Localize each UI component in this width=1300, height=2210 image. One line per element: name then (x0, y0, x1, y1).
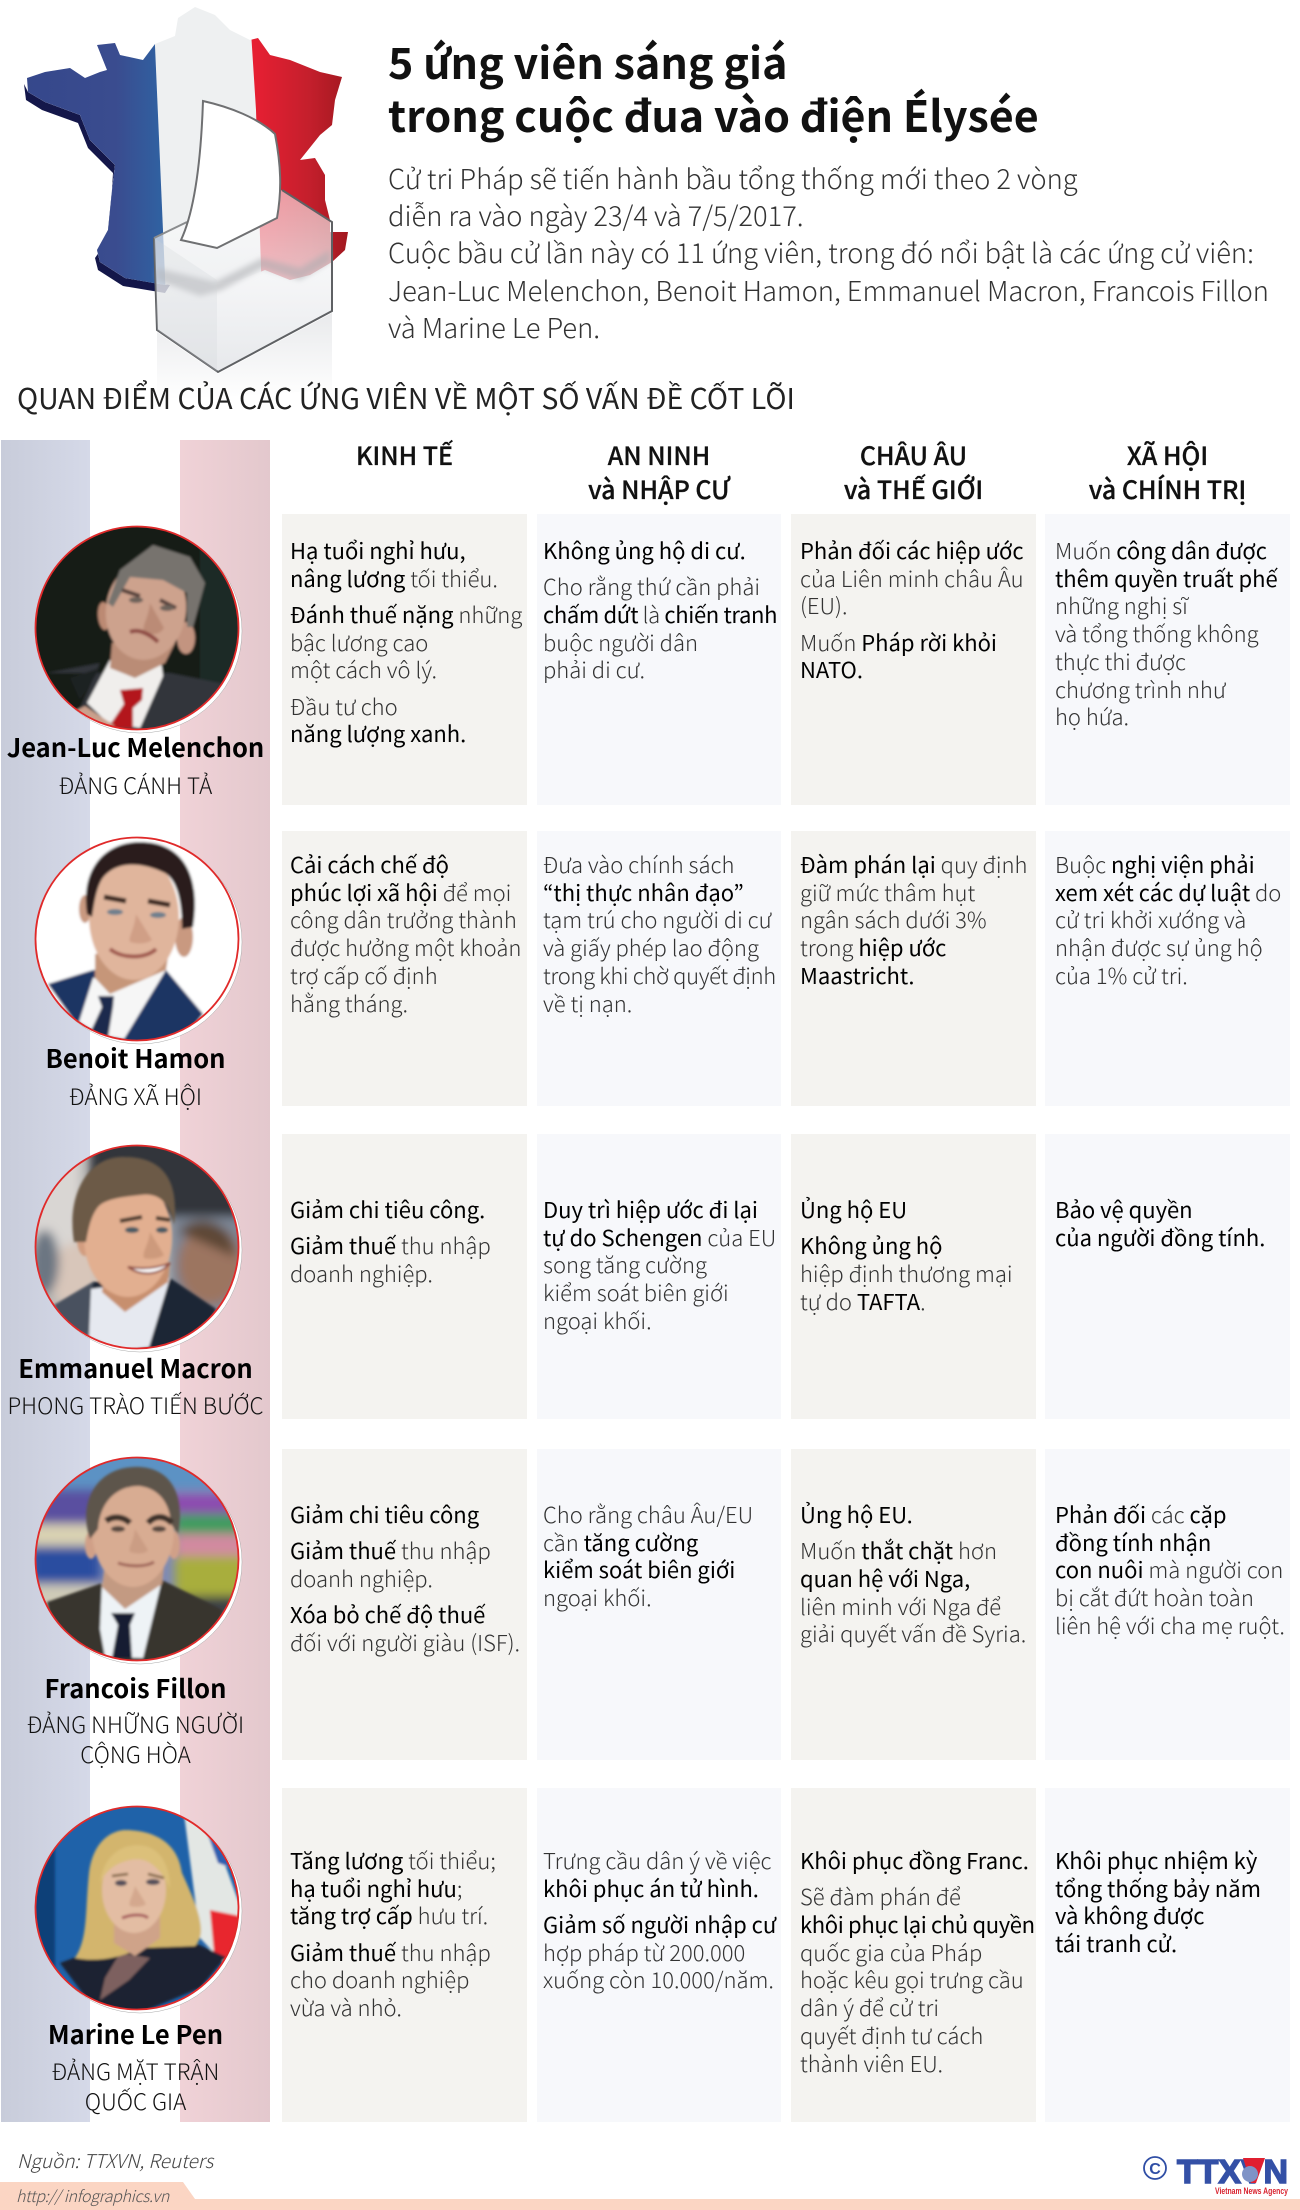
cell: society, Melenchon: những nghị sĩ (1055, 589, 1188, 621)
column heading: security and immigration: và NHẬP CƯ (588, 471, 730, 507)
cell: Europe, Le Pen: thành viên EU. (800, 2047, 943, 2079)
cell: security, Hamon: Đưa vào chính sách (543, 848, 734, 880)
portrait: Marine Le Pen (34, 1806, 242, 2014)
cell: security, Fillon: Cho rằng châu Âu/EU (543, 1498, 753, 1530)
map extrusion (24, 84, 170, 293)
cell: Europe, Macron: Ủng hộ EU (800, 1193, 907, 1225)
header illustration: France map with ballot box (24, 7, 348, 374)
cell: society, Fillon: liên hệ với cha mẹ ruột. (1055, 1609, 1285, 1641)
cell: economy, Fillon: doanh nghiệp. (290, 1562, 433, 1594)
cell: Europe, Fillon: liên minh với Nga để (800, 1590, 1001, 1622)
column heading: economy: KINH TẾ (356, 437, 453, 473)
cell: society, Fillon: đồng tính nhận (1055, 1526, 1211, 1558)
portrait: Emmanuel Macron (34, 1144, 242, 1352)
cell: Europe, Melenchon: Muốn Pháp rời khỏi (800, 626, 997, 658)
intro text: diễn ra vào ngày 23/4 và 7/5/2017. (388, 194, 804, 234)
cell: society, Hamon: của 1% cử tri. (1055, 959, 1188, 991)
column heading: security and immigration (588, 437, 731, 507)
cell: economy, Hamon: trợ cấp cố định (290, 959, 438, 991)
cell: society, Hamon (1045, 831, 1290, 1106)
cell: security, Hamon (537, 831, 781, 1106)
cell: security, Le Pen: khôi phục án tử hình. (543, 1872, 759, 1904)
cell: Europe, Le Pen: Sẽ đàm phán để (800, 1880, 961, 1912)
cell: Europe, Hamon: Đàm phán lại quy định (800, 848, 1027, 880)
cell: security, Le Pen: hợp pháp từ 200.000 (543, 1936, 745, 1968)
cell: society, Le Pen: và không được (1055, 1899, 1204, 1931)
cell: Europe, Melenchon: (EU). (800, 589, 847, 621)
cell: economy, Melenchon: Đánh thuế nặng những (290, 598, 522, 630)
logo: TTXVN: C (1149, 2161, 1161, 2178)
cell: Europe, Fillon: quan hệ với Nga, (800, 1562, 970, 1594)
cell: economy, Hamon: được hưởng một khoản (290, 931, 521, 963)
column heading: society and politics: và CHÍNH TRỊ (1089, 471, 1246, 507)
logo: TTXVN: TTXVN (1177, 2153, 1288, 2190)
party: National Front: ĐẢNG MẶT TRẬN (52, 2055, 219, 2087)
cell: security, Hamon: “thị thực nhân đạo” (543, 876, 744, 908)
cell: Europe, Le Pen: quyết định tư cách (800, 2019, 983, 2051)
cell: Europe, Melenchon: Phản đối các hiệp ước (800, 534, 1024, 566)
cell: Europe, Macron: tự do TAFTA. (800, 1285, 926, 1317)
party: Republicans: CỘNG HÒA (80, 1738, 191, 1770)
intro text: Cuộc bầu cử lần này có 11 ứng viên, trong đó nổi bật là các ứng cử viên: (388, 231, 1254, 271)
cell: economy, Melenchon (282, 514, 527, 805)
cell: security, Fillon: cần tăng cường (543, 1526, 698, 1558)
cell: economy, Fillon (282, 1449, 527, 1760)
cell: Europe, Hamon: Maastricht. (800, 959, 914, 991)
cell: security, Macron: song tăng cường (543, 1248, 707, 1280)
section heading: QUAN ĐIỂM CỦA CÁC ỨNG VIÊN VỀ MỘT SỐ VẤN ĐỀ CỐT LÕI (17, 377, 795, 418)
column heading: Europe and world: CHÂU ÂU (860, 437, 967, 473)
cell: Europe, Melenchon (791, 514, 1036, 805)
cell: security, Le Pen: xuống còn 10.000/năm. (543, 1963, 774, 1995)
cell: economy, Macron: Giảm chi tiêu công. (290, 1193, 485, 1225)
cell: economy, Hamon: hằng tháng. (290, 987, 408, 1019)
cell: economy, Hamon: công dân trưởng thành (290, 903, 517, 935)
cell: economy, Melenchon: nâng lương tối thiểu. (290, 562, 498, 594)
cell: society, Melenchon: thêm quyền truất phế (1055, 562, 1278, 594)
portrait: Jean-Luc Melenchon (34, 526, 242, 734)
intro text: Cử tri Pháp sẽ tiến hành bầu tổng thống mới theo 2 vòng (388, 157, 1078, 197)
cell: economy, Fillon: đối với người giàu (ISF). (290, 1626, 520, 1658)
source note: Nguồn: TTXVN, Reuters (17, 2147, 213, 2174)
cell: security, Le Pen (537, 1788, 781, 2122)
cell: Europe, Le Pen: khôi phục lại chủ quyền (800, 1908, 1035, 1940)
portrait: Francois Fillon (34, 1456, 242, 1664)
cell: society, Le Pen: tái tranh cử. (1055, 1927, 1177, 1959)
cell: society, Le Pen: Khôi phục nhiệm kỳ (1055, 1844, 1257, 1876)
cell: economy, Macron (282, 1134, 527, 1419)
party: National Front: QUỐC GIA (85, 2084, 186, 2116)
cell: economy, Fillon: Giảm thuế thu nhập (290, 1534, 491, 1566)
portrait: Benoit Hamon (34, 836, 242, 1044)
tricolour background stripes (1, 440, 270, 2122)
cell: security, Melenchon (537, 514, 781, 805)
logo: TTXVN (1143, 2153, 1288, 2196)
cell: security, Hamon: trong khi chờ quyết định (543, 959, 776, 991)
cell: economy, Macron: Giảm thuế thu nhập (290, 1229, 491, 1261)
intro text (388, 157, 1269, 346)
map colour bands (27, 7, 348, 285)
cell: economy, Hamon (282, 831, 527, 1106)
cell: economy, Le Pen: vừa và nhỏ. (290, 1991, 402, 2023)
cell: society, Macron (1045, 1134, 1290, 1419)
cell: society, Fillon: bị cắt đứt hoàn toàn (1055, 1581, 1254, 1613)
cell: economy, Fillon: Xóa bỏ chế độ thuế (290, 1598, 485, 1630)
cell: economy, Hamon: Cải cách chế độ (290, 848, 449, 880)
cell: Europe, Macron: hiệp định thương mại (800, 1257, 1013, 1289)
title (388, 30, 1039, 145)
cell: Europe, Melenchon: của Liên minh châu Âu (800, 562, 1024, 594)
cell: security, Melenchon: chấm dứt là chiến tranh (543, 598, 777, 630)
cell: Europe, Le Pen (791, 1788, 1036, 2122)
cell: Europe, Le Pen: dân ý để cử tri (800, 1991, 939, 2023)
cell: security, Macron: Duy trì hiệp ước đi lại (543, 1193, 758, 1225)
column heading: Europe and world: và THẾ GIỚI (844, 471, 983, 507)
cell: Europe, Fillon: Ủng hộ EU. (800, 1498, 913, 1530)
title: 5 ứng viên sáng giá (388, 30, 788, 92)
party: left wing: ĐẢNG CÁNH TẢ (59, 769, 212, 801)
cell: society, Fillon: con nuôi mà người con (1055, 1553, 1283, 1585)
party: Republicans (27, 1708, 244, 1770)
cell: economy, Macron: doanh nghiệp. (290, 1257, 433, 1289)
footer band (0, 2182, 1300, 2210)
cell: security, Melenchon: phải di cư. (543, 653, 645, 685)
name: Francois Fillon: Francois Fillon (45, 1669, 226, 1706)
cell: security, Melenchon: Không ủng hộ di cư. (543, 534, 746, 566)
intro text: và Marine Le Pen. (388, 306, 600, 346)
cell: security, Hamon: về tị nạn. (543, 987, 632, 1019)
cell: Europe, Le Pen: Khôi phục đồng Franc. (800, 1844, 1029, 1876)
cell: security, Fillon (537, 1449, 781, 1760)
cell: economy, Le Pen: tăng trợ cấp hưu trí. (290, 1899, 488, 1931)
cell: society, Le Pen (1045, 1788, 1290, 2122)
cell: economy, Melenchon: Hạ tuổi nghỉ hưu, (290, 534, 466, 566)
cell: Europe, Macron (791, 1134, 1036, 1419)
website url: http:// infographics.vn (16, 2183, 169, 2207)
cell: security, Macron: tự do Schengen của EU (543, 1221, 776, 1253)
name: Emmanuel Macron: Emmanuel Macron (18, 1349, 253, 1386)
cell: society, Macron: Bảo vệ quyền (1055, 1193, 1193, 1225)
name: Jean-Luc Melenchon: Jean-Luc Melenchon (7, 728, 264, 765)
cell: security, Macron: kiểm soát biên giới (543, 1276, 729, 1308)
cell: Europe, Fillon: Muốn thắt chặt hơn (800, 1534, 997, 1566)
cell: society, Fillon: Phản đối các cặp (1055, 1498, 1227, 1530)
cell: security, Hamon: tạm trú cho người di cư (543, 903, 772, 935)
cell: security, Melenchon: buộc người dân (543, 626, 698, 658)
cell: society, Hamon: cử tri khởi xướng và (1055, 903, 1246, 935)
cell: society, Melenchon: chương trình như (1055, 673, 1226, 705)
cell: society, Macron: của người đồng tính. (1055, 1221, 1265, 1253)
cell: security, Macron (537, 1134, 781, 1419)
cell: society, Melenchon: và tổng thống không (1055, 617, 1259, 649)
cell: Europe, Le Pen: hoặc kêu gọi trưng cầu (800, 1963, 1024, 1995)
cell: economy, Melenchon: Đầu tư cho (290, 690, 398, 722)
cell: society, Melenchon: thực thi được (1055, 645, 1186, 677)
column heading: Europe and world (844, 437, 983, 507)
cell: security, Macron: ngoại khối. (543, 1304, 652, 1336)
intro text: Jean-Luc Melenchon, Benoit Hamon, Emmanuel Macron, Francois Fillon (388, 269, 1269, 309)
column heading: society and politics (1088, 437, 1246, 507)
cell: security, Fillon: kiểm soát biên giới (543, 1553, 735, 1585)
cell: society, Melenchon (1045, 514, 1290, 805)
cell: Europe, Le Pen: quốc gia của Pháp (800, 1936, 982, 1968)
title: trong cuộc đua vào điện Élysée (388, 83, 1039, 145)
name: Benoit Hamon: Benoit Hamon (45, 1039, 226, 1076)
cell: security, Hamon: và giấy phép lao động (543, 931, 759, 963)
party: National Front (52, 2055, 219, 2116)
ballot paper (181, 101, 280, 248)
cell: Europe, Fillon (791, 1449, 1036, 1760)
cell: economy, Melenchon: bậc lương cao (290, 626, 428, 658)
ballot box (154, 190, 332, 372)
cell: society, Le Pen: tổng thống bảy năm (1055, 1872, 1261, 1904)
cell: economy, Le Pen: Tăng lương tối thiểu; (290, 1844, 496, 1876)
cell: society, Melenchon: họ hứa. (1055, 700, 1129, 732)
cell: economy, Le Pen: Giảm thuế thu nhập (290, 1936, 491, 1968)
cell: Europe, Hamon (791, 831, 1036, 1106)
party: socialist: ĐẢNG XÃ HỘI (69, 1080, 202, 1112)
party: Republicans: ĐẢNG NHỮNG NGƯỜI (27, 1708, 244, 1740)
cell: security, Le Pen: Trưng cầu dân ý về việc (543, 1844, 772, 1876)
name: Marine Le Pen: Marine Le Pen (48, 2015, 223, 2052)
cell: Europe, Fillon: giải quyết vấn đề Syria. (800, 1617, 1026, 1649)
cell: economy, Fillon: Giảm chi tiêu công (290, 1498, 479, 1530)
cell: society, Hamon: xem xét các dự luật do (1055, 876, 1281, 908)
cell: Europe, Macron: Không ủng hộ (800, 1229, 942, 1261)
cell: society, Hamon: Buộc nghị viện phải (1055, 848, 1255, 880)
cell: Europe, Hamon: trong hiệp ước (800, 931, 946, 963)
party: En Marche: PHONG TRÀO TIẾN BƯỚC (7, 1389, 264, 1421)
cell: economy, Le Pen: hạ tuổi nghỉ hưu; (290, 1872, 462, 1904)
box reflection (157, 313, 332, 400)
cell: Europe, Melenchon: NATO. (800, 653, 863, 685)
cell: society, Melenchon: Muốn công dân được (1055, 534, 1267, 566)
cell: economy, Melenchon: một cách vô lý. (290, 653, 437, 685)
column heading: security and immigration: AN NINH (608, 437, 710, 473)
cell: security, Fillon: ngoại khối. (543, 1581, 652, 1613)
cell: security, Le Pen: Giảm số người nhập cư (543, 1908, 776, 1940)
cell: society, Hamon: nhận được sự ủng hộ (1055, 931, 1263, 963)
cell: Europe, Hamon: giữ mức thâm hụt (800, 876, 975, 908)
cell: economy, Le Pen (282, 1788, 527, 2122)
cell: economy, Le Pen: cho doanh nghiệp (290, 1963, 469, 1995)
cell: economy, Hamon: phúc lợi xã hội để mọi (290, 876, 511, 908)
cell: economy, Melenchon: năng lượng xanh. (290, 717, 466, 749)
cell: Europe, Hamon: ngân sách dưới 3% (800, 903, 987, 935)
column heading: society and politics: XÃ HỘI (1127, 437, 1208, 473)
cell: security, Melenchon: Cho rằng thứ cần phải (543, 570, 760, 602)
cell: society, Fillon (1045, 1449, 1290, 1760)
